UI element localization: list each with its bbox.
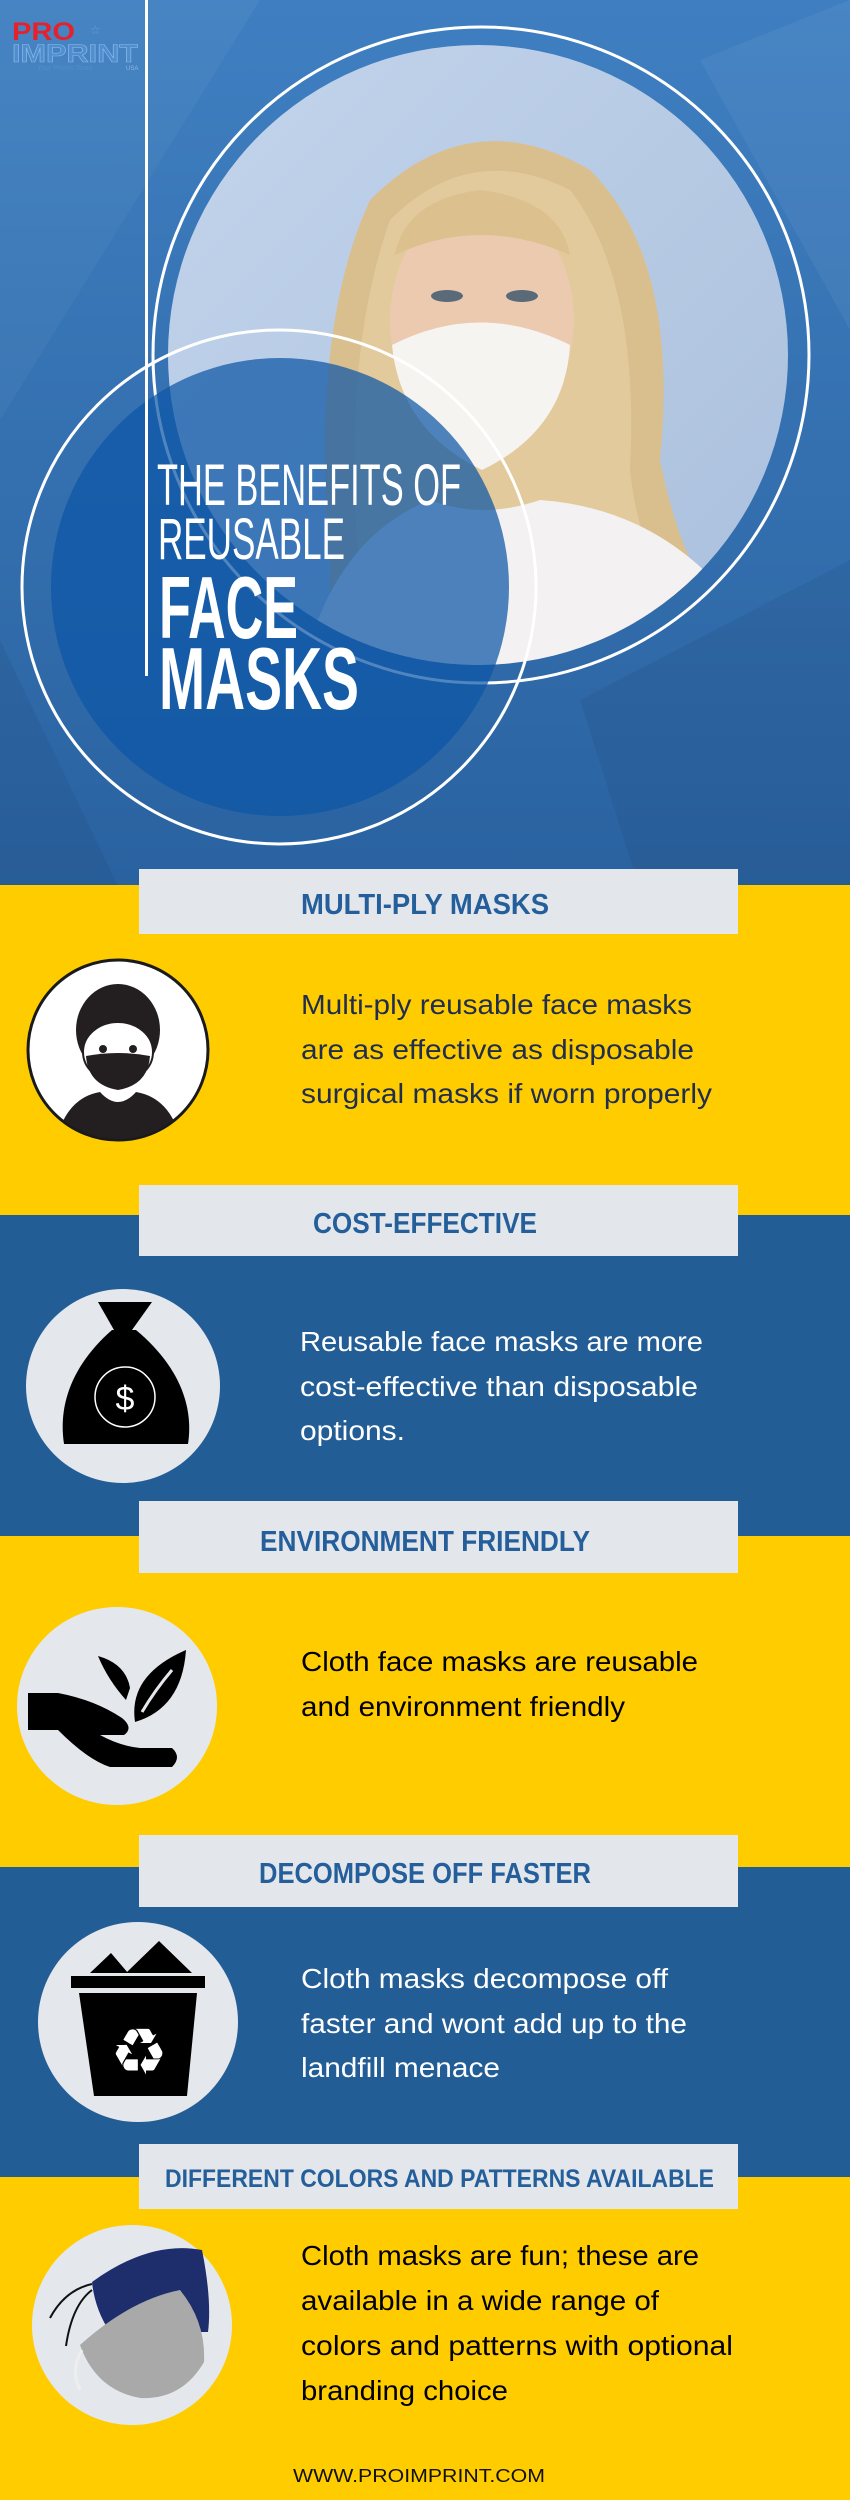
heading bar: environment: ENVIRONMENT FRIENDLY	[260, 1526, 590, 1558]
title: FACE	[159, 558, 298, 657]
panel: multi-ply masks	[28, 869, 738, 1145]
text: cost-effective: Reusable face masks are more	[300, 1326, 703, 1357]
heading bar: decompose: DECOMPOSE OFF FASTER	[259, 1858, 591, 1890]
text: decompose: landfill menace	[301, 2052, 500, 2083]
icon: money bag	[26, 1289, 220, 1483]
icon: money bag: $	[116, 1380, 135, 1418]
panel: different colors and patterns	[32, 2144, 738, 2425]
text: multi-ply: are as effective as disposable	[301, 1034, 694, 1065]
heading bar: multi-ply: MULTI-PLY MASKS	[301, 889, 549, 921]
small translucent circle	[51, 358, 509, 816]
text: cost-effective: options.	[300, 1415, 405, 1446]
logo: IMPRINT	[12, 40, 138, 68]
header background	[0, 0, 850, 890]
title: THE BENEFITS OF	[157, 453, 461, 518]
text: colors	[301, 2240, 733, 2406]
text: decompose	[301, 1963, 687, 2083]
icon: masked person	[28, 960, 208, 1145]
logo: USA	[126, 66, 138, 72]
logo: Your Promo Team	[37, 65, 93, 72]
text: colors: Cloth masks are fun; these are	[301, 2240, 699, 2271]
logo: PRO	[12, 18, 75, 46]
heading bar: cost-effective	[139, 1185, 738, 1256]
footer url: WWW.PROIMPRINT.COM	[293, 2466, 545, 2486]
logo	[12, 18, 138, 72]
heading bar: colors	[139, 2144, 738, 2209]
panel: decompose off faster	[38, 1835, 738, 2122]
text: multi-ply: surgical masks if worn properly	[301, 1078, 712, 1109]
text: colors: colors and patterns with optional	[301, 2330, 733, 2361]
title	[157, 453, 461, 728]
text: decompose: Cloth masks decompose off	[301, 1963, 668, 1994]
icon: cloth masks	[32, 2225, 232, 2425]
icon: recycle bin	[38, 1922, 238, 2122]
text: cost-effective	[300, 1326, 703, 1446]
text: environment	[301, 1646, 698, 1722]
heading bar: multi-ply	[139, 869, 738, 934]
title: REUSABLE	[158, 507, 345, 572]
heading bar: environment	[139, 1501, 738, 1573]
panel: cost-effective	[26, 1185, 738, 1483]
text: cost-effective: cost-effective than disposable	[300, 1371, 698, 1402]
text: colors: branding choice	[301, 2375, 508, 2406]
icon: hand with leaf	[17, 1607, 217, 1805]
heading bar: cost-effective: COST-EFFECTIVE	[313, 1208, 537, 1240]
text: environment: and environment friendly	[301, 1691, 625, 1722]
text: colors: available in a wide range of	[301, 2285, 659, 2316]
vertical line	[145, 0, 148, 676]
header photo circle: woman wearing mask	[160, 40, 800, 700]
text: multi-ply: Multi-ply reusable face masks	[301, 989, 692, 1020]
small circle outline	[22, 330, 536, 844]
title: MASKS	[159, 629, 359, 728]
heading bar: decompose	[139, 1835, 738, 1907]
section backgrounds	[0, 885, 850, 2500]
text: decompose: faster and wont add up to the	[301, 2008, 687, 2039]
large circle outline	[153, 27, 809, 683]
logo: ☆	[90, 23, 101, 37]
panel: environment friendly	[17, 1501, 738, 1805]
text: multi-ply	[301, 989, 712, 1109]
icon: recycle bin: ♻	[110, 2016, 168, 2090]
heading bar: colors: DIFFERENT COLORS AND PATTERNS AVAILABLE	[165, 2165, 714, 2193]
text: environment: Cloth face masks are reusable	[301, 1646, 698, 1677]
